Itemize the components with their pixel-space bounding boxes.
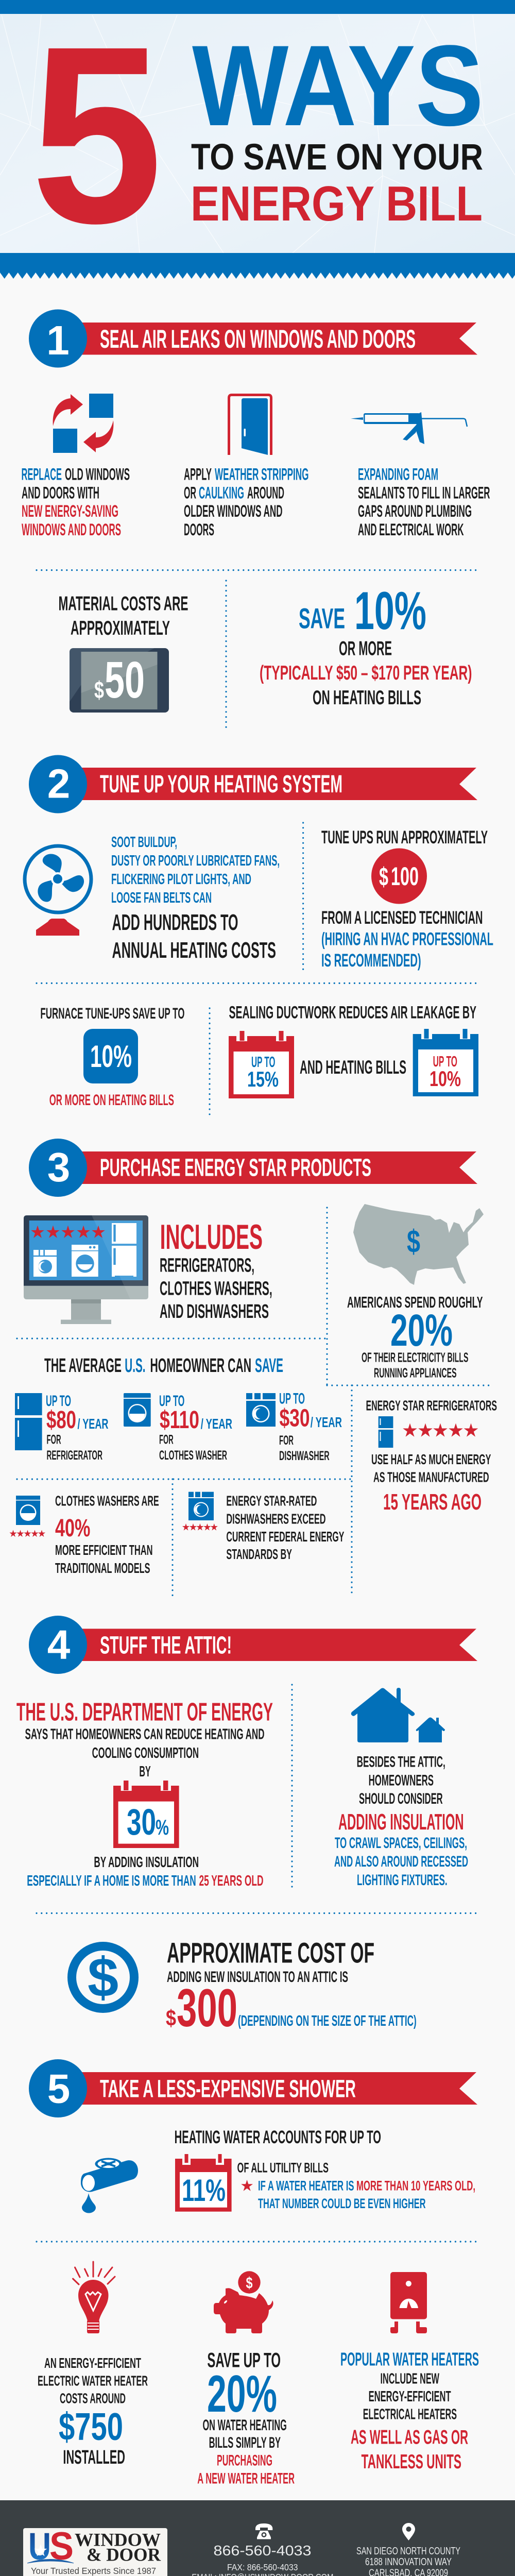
- icon: door: [229, 395, 271, 455]
- text: besides the attic: [334, 1753, 468, 1889]
- savings: clothes washer: CLOTHES WASHER: [159, 1448, 227, 1463]
- text: includes: AND DISHWASHERS: [160, 1301, 269, 1323]
- text: electric water heater cost: INSTALLED: [63, 2447, 125, 2468]
- icon: calendar 15%: UP TO: [251, 1054, 275, 1071]
- text: heating water share: [175, 2127, 475, 2212]
- icon: calendar 11%: [175, 2154, 232, 2212]
- icon: dollar coin: [72, 1946, 134, 2008]
- text: popular water heaters: ENERGY-EFFICIENT: [369, 2388, 451, 2405]
- icon: fan: [25, 846, 91, 936]
- icon: USA map with dollar: $: [407, 1224, 420, 1260]
- icon: replace windows arrows: [53, 394, 113, 453]
- logo: & DOOR: [87, 2544, 161, 2565]
- text: department of energy: ESPECIALLY IF A HOME IS MORE THAN: [27, 1873, 196, 1889]
- icon: calendar 15%: [229, 1031, 294, 1098]
- icon: USA map with dollar: [353, 1204, 484, 1285]
- text: soot buildup: ANNUAL HEATING COSTS: [112, 938, 276, 963]
- section 5 banner: 5: [47, 2066, 70, 2111]
- text: popular water heaters: [340, 2348, 479, 2473]
- text: approximate cost: APPROXIMATE COST OF: [167, 1936, 374, 1969]
- icon: calendar 10%: [413, 1029, 478, 1096]
- callout: clothes washers 40%: 40%: [55, 1515, 90, 1542]
- callout: clothes washers 40%: [9, 1493, 159, 1576]
- text: phone: 866-560-4033: [213, 2543, 311, 2558]
- text: department of energy: COOLING CONSUMPTION: [92, 1745, 199, 1761]
- text: approximate cost: $: [166, 2006, 176, 2031]
- text: fax and email: [192, 2562, 333, 2576]
- text: approximate cost: [166, 1936, 417, 2038]
- icon: calendar 11%: 11%: [182, 2173, 226, 2208]
- footer: [0, 2500, 515, 2576]
- text: address: [356, 2546, 460, 2576]
- icon: tablet with $50: 50: [105, 651, 145, 709]
- text: furnace tune-ups: OR MORE ON HEATING BILLS: [49, 1092, 174, 1109]
- section 5 banner: [29, 2059, 477, 2117]
- savings: refrigerator: UP TO: [46, 1393, 71, 1410]
- heading: average homeowner: SAVE: [255, 1355, 283, 1377]
- section 1 banner: [29, 309, 477, 368]
- text: fax and email: FAX: 866-560-4033: [227, 2562, 298, 2572]
- savings: refrigerator: / YEAR: [77, 1416, 108, 1432]
- text: replace windows: REPLACE: [22, 465, 62, 483]
- text: replace windows: NEW ENERGY-SAVING: [22, 502, 118, 520]
- text: besides the attic: HOMEOWNERS: [369, 1772, 434, 1789]
- text: replace windows: [22, 465, 130, 539]
- section 3 panel: energy star: [9, 1139, 497, 1597]
- text: approximate cost: ADDING NEW INSULATION TO AN ATTIC IS: [167, 1969, 348, 1986]
- callout: clothes washers 40%: TRADITIONAL MODELS: [55, 1560, 150, 1576]
- text: department of energy: BY: [139, 1764, 151, 1780]
- savings: clothes washer: / YEAR: [201, 1416, 232, 1432]
- text: heating water share: IF A WATER HEATER IS: [258, 2178, 354, 2193]
- text: electric water heater cost: COSTS AROUND: [60, 2391, 126, 2406]
- text: soot buildup: SOOT BUILDUP,: [111, 834, 177, 851]
- text: furnace tune-ups: FURNACE TUNE-UPS SAVE UP TO: [40, 1005, 184, 1022]
- callout: energy star refrigerators: [366, 1397, 497, 1515]
- section 4 panel: stuff the attic: [16, 1616, 479, 2038]
- icon: location pin: [402, 2523, 415, 2540]
- text: includes: CLOTHES WASHERS,: [160, 1278, 272, 1299]
- section 2 banner: TUNE UP YOUR HEATING SYSTEM: [100, 771, 342, 798]
- section 5 panel: shower: [29, 2059, 479, 2487]
- text: americans spend: 20%: [390, 1306, 453, 1355]
- savings: refrigerator: [15, 1393, 108, 1463]
- header banner: [0, 0, 515, 279]
- text: popular water heaters: INCLUDE NEW: [380, 2371, 439, 2387]
- heading: average homeowner: U.S.: [125, 1355, 145, 1377]
- text: furnace tune-ups: [40, 1005, 184, 1109]
- savings: refrigerator: REFRIGERATOR: [46, 1448, 102, 1463]
- text: address: SAN DIEGO NORTH COUNTY: [356, 2546, 460, 2557]
- text: sealing ductwork: AND HEATING BILLS: [300, 1057, 406, 1078]
- text: americans spend: [347, 1293, 483, 1381]
- title: big 5: 5: [31, 0, 163, 276]
- callout: dishwashers exceed standards: CURRENT FEDERAL ENERGY: [226, 1529, 345, 1545]
- text: save 10%: SAVE: [299, 602, 345, 634]
- callout: clothes washers 40%: MORE EFFICIENT THAN: [55, 1542, 153, 1558]
- text: includes: REFRIGERATORS,: [160, 1255, 254, 1277]
- savings: clothes washer: UP TO: [159, 1393, 184, 1410]
- logo: S: [49, 2524, 74, 2568]
- callout: dishwashers exceed standards: ENERGY STAR-RATED: [226, 1493, 317, 1509]
- text: material costs: APPROXIMATELY: [71, 617, 170, 639]
- callout: clothes washers 40%: CLOTHES WASHERS ARE: [55, 1493, 159, 1509]
- text: department of energy: [16, 1698, 273, 1889]
- text: material costs: MATERIAL COSTS ARE: [59, 593, 188, 615]
- callout: dishwashers exceed standards: DISHWASHERS EXCEED: [226, 1511, 326, 1527]
- text: save up to 20%: SAVE UP TO: [207, 2349, 281, 2372]
- text: includes: INCLUDES: [160, 1217, 263, 1257]
- savings: dishwasher: DISHWASHER: [279, 1449, 330, 1463]
- text: electric water heater cost: AN ENERGY-EFFICIENT: [44, 2355, 141, 2371]
- text: weather stripping: DOORS: [184, 520, 214, 539]
- section 1 banner: 1: [46, 317, 70, 363]
- text: weather stripping: AROUND: [247, 483, 284, 502]
- icon: telephone: [255, 2523, 272, 2539]
- logo: Your Trusted Experts Since 1987: [31, 2566, 156, 2576]
- title: energy bill: ENERGY BILL: [191, 176, 483, 231]
- text: electric water heater cost: ELECTRIC WATER HEATER: [38, 2372, 148, 2388]
- text: department of energy: THE U.S. DEPARTMENT OF ENERGY: [16, 1698, 273, 1726]
- text: electric water heater cost: [38, 2355, 148, 2468]
- section 3 banner: 3: [47, 1144, 70, 1190]
- text: heating water share: OF ALL UTILITY BILLS: [237, 2160, 329, 2176]
- text: department of energy: 25 YEARS OLD: [199, 1873, 264, 1889]
- text: expanding foam: EXPANDING FOAM: [358, 465, 438, 483]
- text: soot buildup: DUSTY OR POORLY LUBRICATED FANS,: [111, 853, 280, 869]
- heading: average homeowner: THE AVERAGE: [44, 1355, 122, 1377]
- text: save 10%: [260, 581, 472, 709]
- icon: calendar 30%: [113, 1781, 179, 1848]
- text: soot buildup: ADD HUNDREDS TO: [112, 910, 238, 935]
- icon: water heater: [390, 2272, 427, 2333]
- text: expanding foam: [358, 465, 490, 539]
- savings: dishwasher: UP TO: [279, 1391, 305, 1408]
- text: electric water heater cost: $750: [59, 2405, 123, 2448]
- text: address: 6188 INNOVATION WAY: [365, 2556, 452, 2568]
- section 2 banner: 2: [47, 760, 70, 807]
- text: save 10%: 10%: [354, 581, 426, 641]
- icon: dollar coin: $: [88, 1946, 118, 2008]
- savings: dishwasher: FOR: [279, 1433, 294, 1448]
- savings: refrigerator: FOR: [46, 1433, 61, 1447]
- text: save up to 20%: ON WATER HEATING: [203, 2417, 287, 2434]
- text: besides the attic: LIGHTING FIXTURES.: [357, 1872, 448, 1889]
- icon: piggy bank: $: [246, 2274, 252, 2292]
- icon: monitor with appliances: [24, 1215, 148, 1324]
- text: save up to 20%: A NEW WATER HEATER: [197, 2470, 295, 2487]
- text: tune ups cost: [321, 827, 493, 971]
- text: approximate cost: 300: [177, 1978, 237, 2038]
- text: weather stripping: WEATHER STRIPPING: [215, 465, 309, 483]
- icon: tablet with $50: [70, 648, 169, 713]
- text: tune ups cost: 100: [391, 862, 419, 891]
- text: save up to 20%: [197, 2349, 295, 2487]
- text: save up to 20%: BILLS SIMPLY BY: [209, 2434, 281, 2451]
- text: besides the attic: SHOULD CONSIDER: [359, 1790, 443, 1807]
- text: department of energy: SAYS THAT HOMEOWNERS CAN REDUCE HEATING AND: [25, 1726, 265, 1743]
- logo: [23, 2524, 167, 2576]
- text: includes: [160, 1217, 272, 1323]
- text: replace windows: OLD WINDOWS: [65, 465, 130, 483]
- savings: clothes washer: [124, 1393, 232, 1463]
- text: save 10%: ON HEATING BILLS: [313, 687, 421, 709]
- heading: average homeowner: HOMEOWNER CAN: [150, 1355, 251, 1377]
- text: replace windows: WINDOWS AND DOORS: [22, 520, 121, 539]
- savings: dishwasher: / YEAR: [311, 1414, 342, 1430]
- icon: calendar 10%: 10%: [430, 1066, 461, 1091]
- icon: piggy bank: [214, 2271, 273, 2333]
- text: besides the attic: BESIDES THE ATTIC,: [357, 1753, 445, 1770]
- text: soot buildup: [111, 834, 280, 963]
- section 2 panel: heating system: [25, 755, 493, 1116]
- text: weather stripping: CAULKING: [199, 483, 244, 502]
- callout: dishwashers exceed standards: [182, 1492, 345, 1562]
- text: weather stripping: APPLY: [184, 465, 212, 483]
- savings: clothes washer: FOR: [159, 1433, 174, 1447]
- savings: refrigerator: $80: [46, 1406, 76, 1434]
- callout: dishwashers exceed standards: STANDARDS BY: [226, 1546, 292, 1562]
- savings: dishwasher: $30: [279, 1405, 310, 1432]
- title: WAYS: WAYS: [192, 22, 484, 150]
- text: sealing ductwork: [229, 1003, 478, 1098]
- icon: dripping tap: [81, 2158, 138, 2213]
- text: weather stripping: OLDER WINDOWS AND: [184, 502, 282, 520]
- icon: calendar 10%: UP TO: [433, 1054, 457, 1070]
- logo: U: [28, 2525, 51, 2568]
- section 1 panel: seal air leaks: [22, 309, 490, 732]
- icon: tablet with $50: $: [94, 676, 104, 703]
- text: soot buildup: FLICKERING PILOT LIGHTS, AND: [111, 871, 251, 888]
- text: tune ups cost: IS RECOMMENDED): [321, 951, 421, 971]
- icon: caulking gun: [351, 412, 467, 444]
- icon: star: [241, 2180, 253, 2191]
- icon: calendar 15%: 15%: [247, 1067, 279, 1091]
- icon: calendar 30%: %: [156, 1815, 169, 1839]
- section 4 banner: 4: [47, 1622, 71, 1667]
- text: save 10%: OR MORE: [339, 638, 392, 660]
- text: tune ups cost: $: [379, 862, 388, 891]
- text: weather stripping: [184, 465, 309, 539]
- text: soot buildup: LOOSE FAN BELTS CAN: [111, 890, 212, 906]
- section 4 banner: STUFF THE ATTIC!: [100, 1632, 232, 1659]
- section 5 banner: TAKE A LESS-EXPENSIVE SHOWER: [100, 2075, 356, 2103]
- text: department of energy: BY ADDING INSULATION: [94, 1854, 199, 1871]
- logo: WINDOW: [75, 2530, 161, 2550]
- section 4 banner: [29, 1616, 477, 1674]
- text: save up to 20%: PURCHASING: [217, 2452, 272, 2469]
- section 2 banner: [29, 755, 477, 813]
- text: weather stripping: OR: [184, 483, 196, 502]
- icon: light bulb: [73, 2262, 115, 2333]
- text: save up to 20%: 20%: [207, 2365, 277, 2423]
- icon: calendar 30%: 30: [127, 1802, 156, 1843]
- text: material costs: [59, 593, 188, 639]
- section 3 banner: [29, 1139, 477, 1197]
- heading: average homeowner: [44, 1355, 283, 1377]
- text: replace windows: AND DOORS WITH: [22, 483, 99, 502]
- text: furnace tune-ups: 10%: [90, 1039, 132, 1074]
- savings: dishwasher: [246, 1391, 342, 1463]
- savings: clothes washer: $110: [160, 1406, 199, 1434]
- icon: houses: [351, 1688, 445, 1742]
